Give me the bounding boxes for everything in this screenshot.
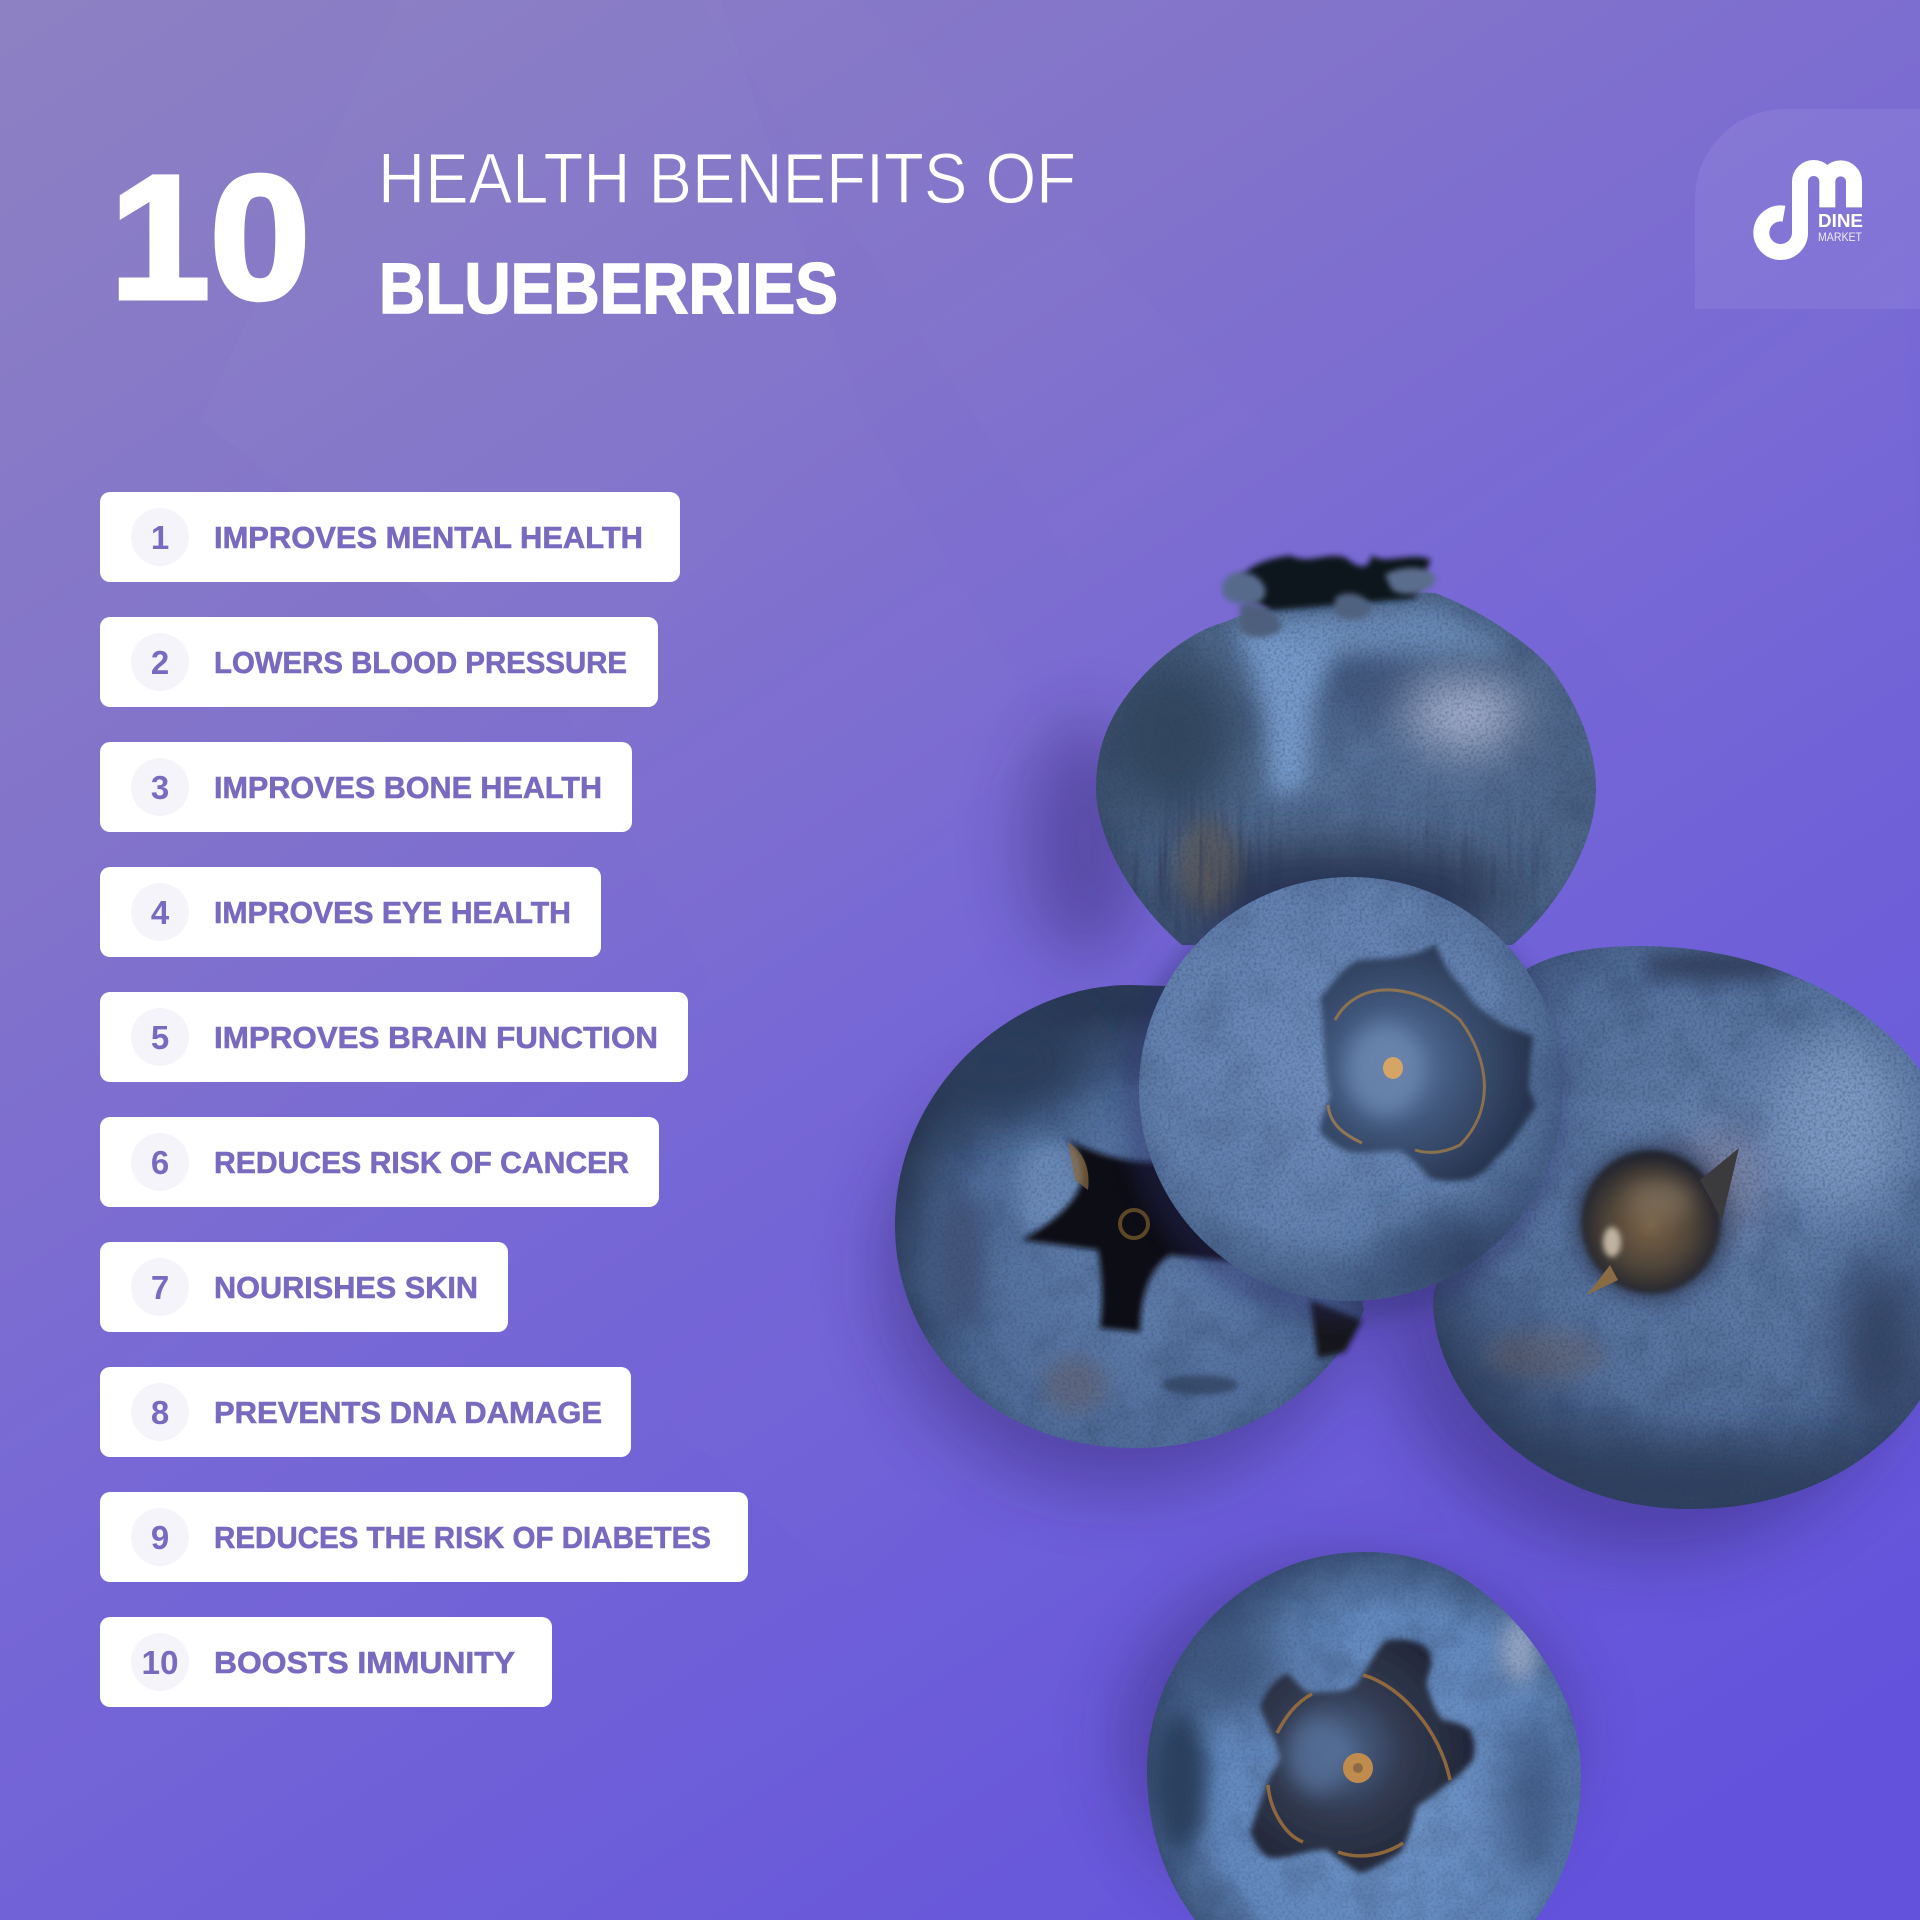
center berry crown xyxy=(1320,944,1536,1181)
logo panel xyxy=(1695,109,1920,309)
item 1: 1 xyxy=(151,519,169,556)
item 8 xyxy=(100,1367,631,1457)
item 7: NOURISHES SKIN xyxy=(214,1270,478,1305)
logo wordmark: DINE xyxy=(1818,210,1863,231)
item 7 xyxy=(100,1242,508,1332)
item 2 xyxy=(100,617,658,707)
item 6: REDUCES RISK OF CANCER xyxy=(214,1145,629,1180)
title line 1: HEALTH BENEFITS OF xyxy=(378,140,1076,219)
background diamond pattern xyxy=(200,0,1920,1590)
blueberry: bottom xyxy=(1140,1545,1590,1920)
item 7: 7 xyxy=(151,1269,169,1306)
blueberry: right xyxy=(1420,930,1920,1521)
item 1 xyxy=(100,492,680,582)
item 4: 4 xyxy=(151,894,170,931)
item 5 xyxy=(100,992,688,1082)
item 5: 5 xyxy=(151,1019,169,1056)
title number 10: 10 xyxy=(110,140,310,336)
item 8: 8 xyxy=(151,1394,169,1431)
item 2: 2 xyxy=(151,644,169,681)
bottom berry crown xyxy=(1250,1639,1475,1873)
item 4: IMPROVES EYE HEALTH xyxy=(214,895,571,930)
title line 2: BLUEBERRIES xyxy=(379,250,838,329)
logo panel: MARKET xyxy=(1818,232,1862,244)
item 2: LOWERS BLOOD PRESSURE xyxy=(214,645,627,680)
blueberry: top xyxy=(1080,556,1610,960)
item 6 xyxy=(100,1117,659,1207)
item 10 xyxy=(100,1617,552,1707)
blueberry: center xyxy=(1123,870,1570,1322)
logo mark xyxy=(1761,168,1854,252)
item 3: IMPROVES BONE HEALTH xyxy=(214,770,602,805)
item 3 xyxy=(100,742,632,832)
blueberry: left xyxy=(895,985,1365,1448)
item 6: 6 xyxy=(151,1144,169,1181)
item 9: 9 xyxy=(151,1519,169,1556)
item 9: REDUCES THE RISK OF DIABETES xyxy=(214,1520,711,1555)
item 5: IMPROVES BRAIN FUNCTION xyxy=(214,1020,658,1055)
item 10: 10 xyxy=(142,1644,178,1681)
berry shadows xyxy=(880,720,1920,1920)
left berry dark scar xyxy=(1310,1300,1362,1358)
top berry calyx xyxy=(1222,556,1436,637)
item 8: PREVENTS DNA DAMAGE xyxy=(214,1395,602,1430)
right berry stem hollow xyxy=(1570,1140,1739,1304)
item 3: 3 xyxy=(151,769,169,806)
item 9 xyxy=(100,1492,748,1582)
item 4 xyxy=(100,867,601,957)
item 1: IMPROVES MENTAL HEALTH xyxy=(214,520,643,555)
benefit list xyxy=(100,492,748,1707)
item 10: BOOSTS IMMUNITY xyxy=(214,1645,515,1680)
left berry star hollow xyxy=(1022,1136,1240,1332)
title xyxy=(110,140,1076,336)
